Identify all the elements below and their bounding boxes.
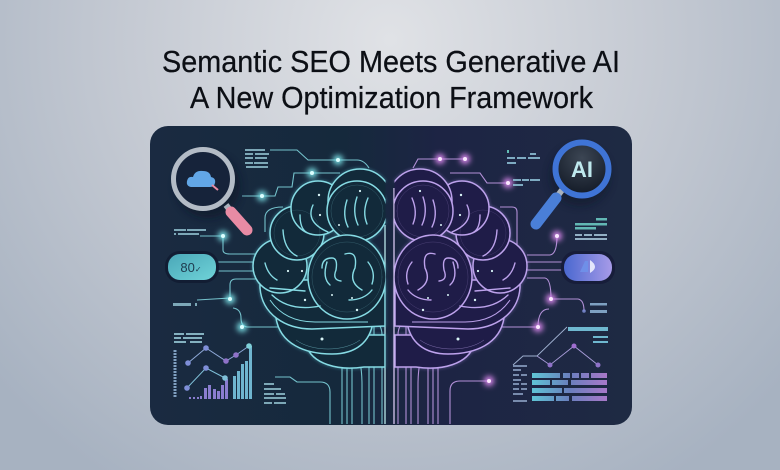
title: A New Optimization Framework bbox=[190, 80, 593, 115]
left score pill: 80✓ bbox=[180, 260, 202, 275]
title bbox=[162, 44, 620, 115]
right text snippets bbox=[507, 150, 607, 313]
glow nodes: left bbox=[218, 155, 343, 332]
centre divider lines bbox=[384, 225, 386, 424]
brain: right purple hemisphere bbox=[388, 169, 527, 368]
left circuit lines bbox=[197, 150, 382, 424]
icon: AI magnifier bbox=[536, 142, 610, 224]
brain: left teal hemisphere bbox=[253, 169, 392, 368]
icon: search magnifier with cloud bbox=[174, 150, 247, 230]
glow nodes: right bbox=[435, 154, 562, 386]
icon: AI magnifier: AI bbox=[571, 157, 593, 182]
panel: dark illustration card bbox=[150, 126, 632, 425]
left text snippets bbox=[173, 149, 286, 404]
left score pill bbox=[165, 251, 219, 283]
right toggle pill bbox=[561, 251, 615, 284]
right circuit lines bbox=[398, 159, 584, 424]
right line chart and table bars bbox=[513, 327, 608, 402]
title: Semantic SEO Meets Generative AI bbox=[162, 44, 620, 79]
left line and bar chart bbox=[174, 333, 252, 399]
